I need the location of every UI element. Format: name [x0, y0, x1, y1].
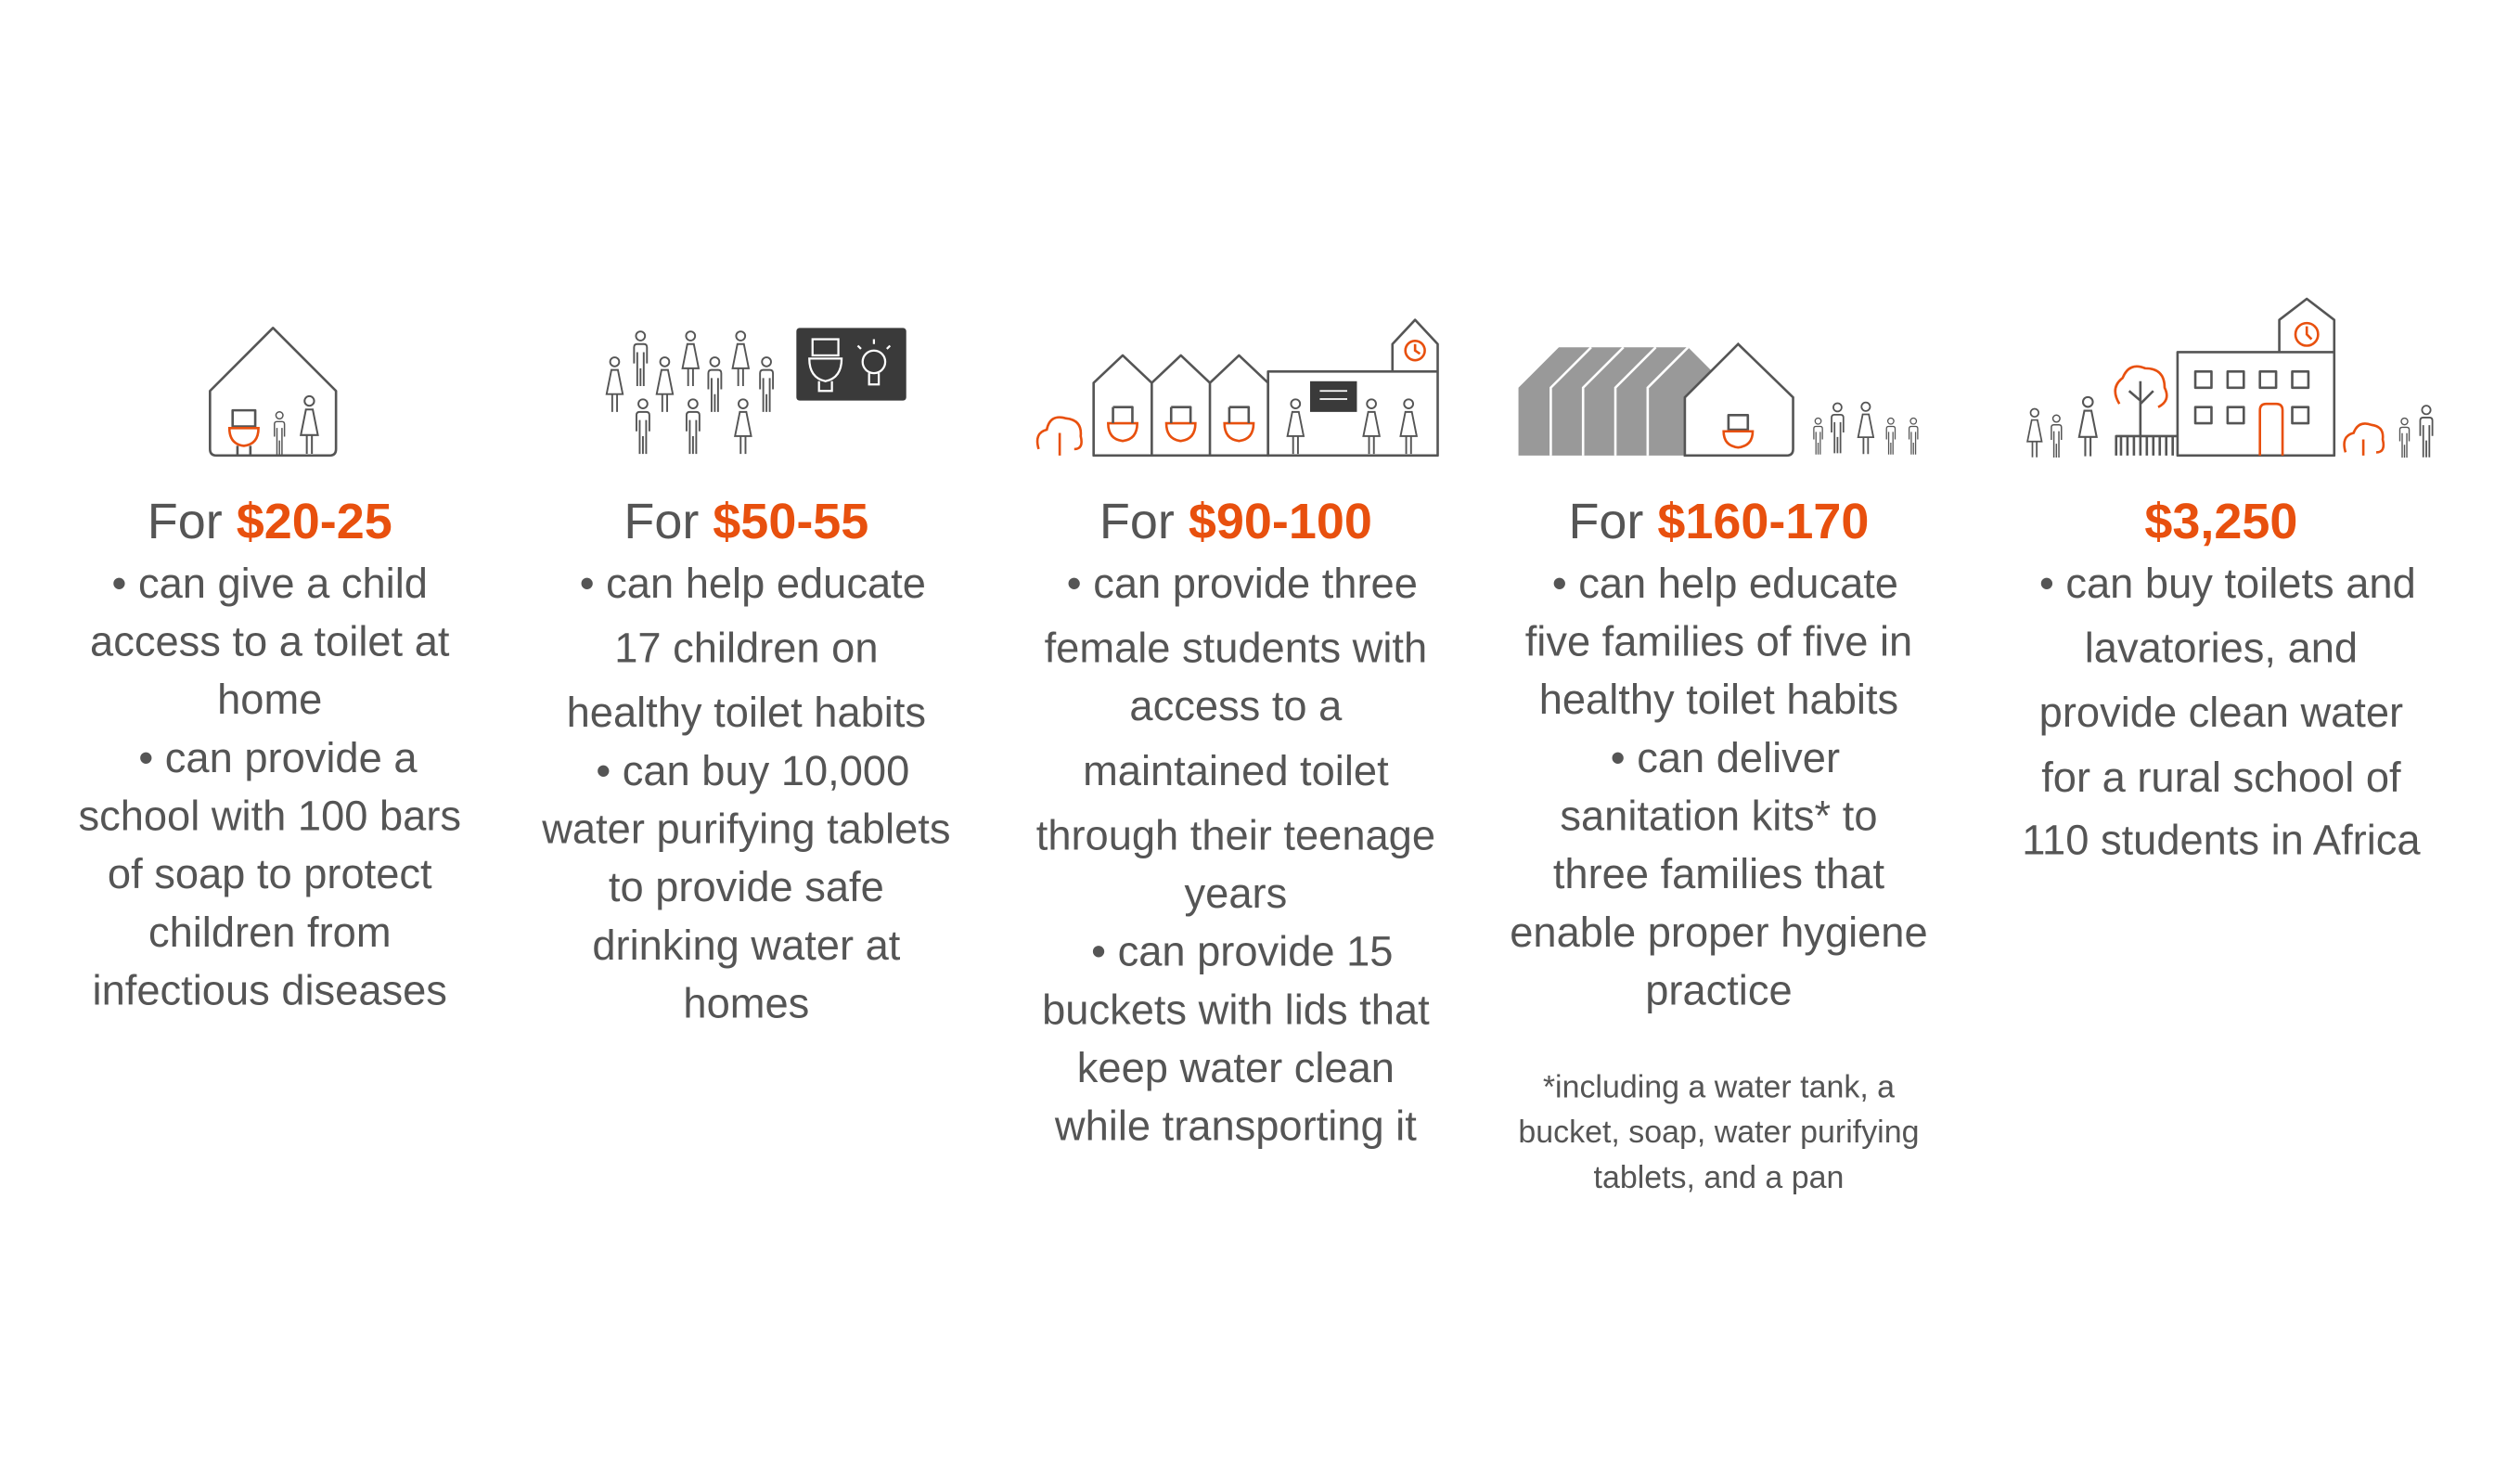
text block: $160-170 details: • can deliver: [1611, 734, 1840, 781]
text block: $20-25 details: access to a toilet at: [90, 618, 450, 665]
text block: $90-100 details: keep water clean: [1077, 1044, 1395, 1091]
text block: $90-100 details: years: [1185, 870, 1287, 917]
icon: house with toilet and family: [210, 328, 336, 456]
text block: $50-55 details: water purifying tablets: [541, 805, 950, 852]
text block: $3,250 details: for a rural school of: [2041, 754, 2401, 801]
panel: $50-55: [541, 494, 950, 1026]
text block: $3,250 details: 110 students in Africa: [2022, 817, 2421, 864]
text block: $90-100 details: • can provide three: [1067, 560, 1418, 607]
panel: $160-170: [1510, 494, 1928, 1195]
text block: $20-25 details: [78, 560, 461, 1014]
icon: houses and families: [1519, 344, 1918, 456]
text block: $90-100 details: maintained toilet: [1083, 747, 1389, 794]
text block: $90-100 details: female students with: [1045, 625, 1427, 672]
text block: $3,250 details: [2022, 560, 2421, 864]
heading: For $20-25: For $20-25: [148, 494, 392, 549]
text block: $90-100 details: [1036, 560, 1435, 1150]
text block: $90-100 details: while transporting it: [1054, 1102, 1417, 1150]
text block: $50-55 details: drinking water at: [592, 922, 901, 969]
heading: For $160-170: For $160-170: [1568, 494, 1869, 549]
text block: $3,250 details: provide clean water: [2039, 689, 2403, 736]
panel: $20-25: [78, 494, 461, 1014]
icon: school toilets and students: [1037, 320, 1438, 456]
footnote: sanitation kit contents: tablets, and a pan: [1594, 1160, 1844, 1195]
text block: $50-55 details: • can help educate: [580, 560, 926, 607]
footnote: sanitation kit contents: [1518, 1069, 1919, 1195]
text block: $50-55 details: homes: [683, 979, 809, 1026]
panel: $3,250: [2022, 494, 2421, 864]
text block: $90-100 details: • can provide 15: [1091, 928, 1393, 975]
text block: $20-25 details: children from: [148, 909, 392, 956]
text block: $160-170 details: [1510, 560, 1928, 1014]
text block: $20-25 details: infectious diseases: [93, 967, 447, 1014]
heading: For $50-55: For $50-55: [624, 494, 868, 549]
text block: $160-170 details: five families of five in: [1525, 618, 1912, 665]
text block: $90-100 details: through their teenage: [1036, 811, 1435, 858]
heading: $3,250: $3,250: [2144, 494, 2297, 549]
text block: $20-25 details: of soap to protect: [108, 850, 432, 897]
text block: $20-25 details: • can provide a: [138, 734, 418, 781]
text block: $160-170 details: • can help educate: [1552, 560, 1898, 607]
text block: $20-25 details: home: [217, 676, 322, 723]
text block: $20-25 details: school with 100 bars: [78, 793, 461, 840]
icon: group of children and toilet board: [607, 328, 906, 454]
text block: $160-170 details: healthy toilet habits: [1539, 676, 1898, 723]
text block: $160-170 details: sanitation kits* to: [1560, 793, 1878, 840]
text block: $160-170 details: practice: [1645, 967, 1793, 1014]
heading: For $90-100: For $90-100: [1099, 494, 1372, 549]
text block: $3,250 details: lavatories, and: [2085, 625, 2358, 672]
panel: $90-100: [1036, 494, 1435, 1150]
text block: $160-170 details: three families that: [1553, 850, 1884, 897]
text block: $50-55 details: • can buy 10,000: [596, 747, 909, 794]
text block: $50-55 details: 17 children on: [614, 625, 879, 672]
text block: $90-100 details: access to a: [1129, 682, 1343, 729]
text block: $50-55 details: healthy toilet habits: [567, 689, 926, 736]
footnote: sanitation kit contents: *including a water tank, a: [1543, 1069, 1895, 1104]
text block: $20-25 details: • can give a child: [112, 560, 428, 607]
text block: $50-55 details: to provide safe: [609, 863, 884, 910]
icon: rural school: [2027, 299, 2433, 458]
text block: $90-100 details: buckets with lids that: [1042, 986, 1430, 1033]
text block: $50-55 details: [541, 560, 950, 1026]
text block: $160-170 details: enable proper hygiene: [1510, 909, 1928, 956]
text block: $3,250 details: • can buy toilets and: [2039, 560, 2416, 607]
footnote: sanitation kit contents: bucket, soap, water purifying: [1518, 1115, 1919, 1150]
